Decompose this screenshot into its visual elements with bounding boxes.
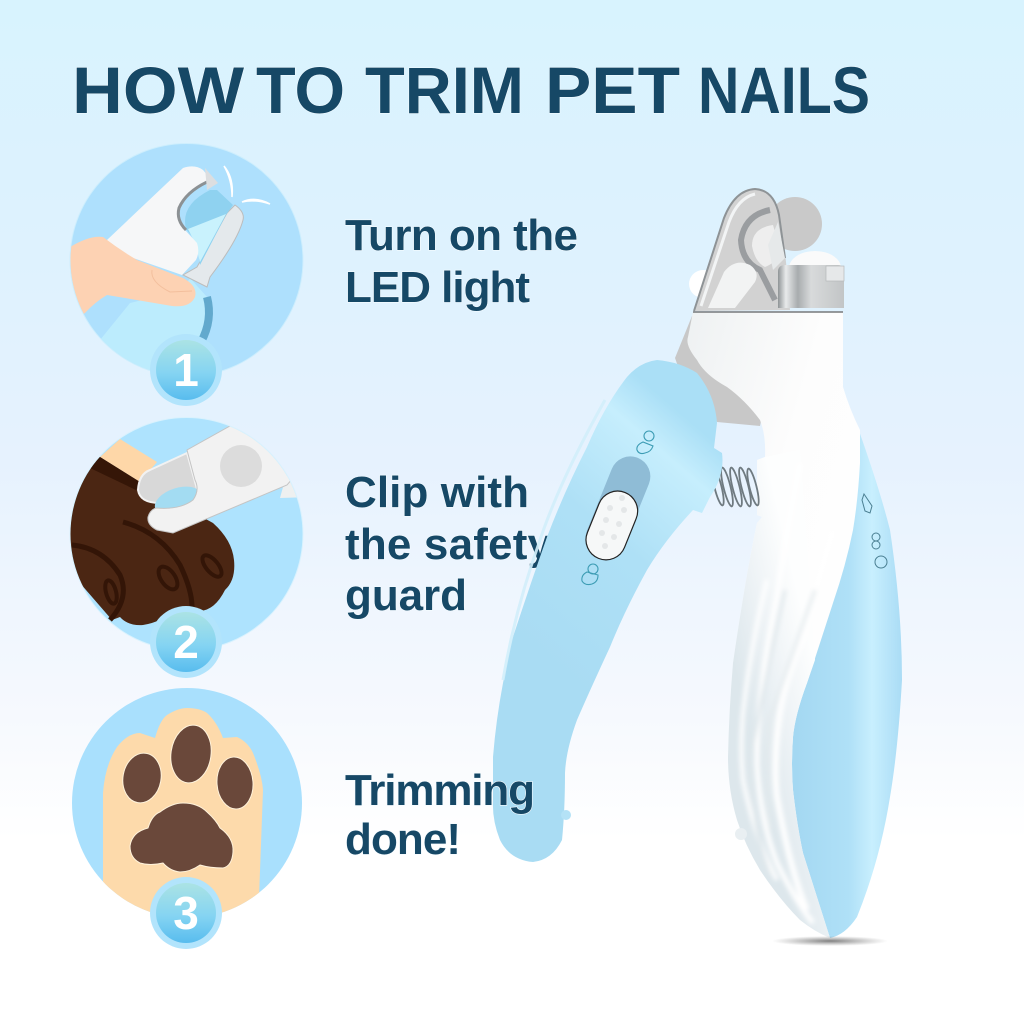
title: HOW (72, 53, 245, 127)
product: nail clipper (493, 189, 902, 946)
clipper guard (138, 453, 200, 503)
step 3 caption (345, 766, 535, 864)
finger (70, 236, 196, 314)
clipper body (147, 426, 290, 534)
number badge 3 (150, 877, 222, 949)
white pill (708, 263, 757, 308)
lock icon top (637, 431, 654, 454)
toe pad right (215, 756, 255, 810)
toe pad left (119, 750, 165, 806)
paw toe lines (72, 522, 192, 620)
step 2 caption: the safety (345, 520, 553, 569)
step 2 caption (345, 468, 553, 620)
number badge 1 (150, 334, 222, 406)
grey back disc (768, 197, 822, 251)
right handle grooves (742, 463, 833, 923)
handle side icons (862, 494, 887, 568)
clipper body (107, 166, 208, 275)
number badge 3: 3 (173, 887, 199, 939)
step 1 caption: Turn on the (345, 211, 578, 260)
panel: step 1 illustration (60, 143, 304, 406)
foot bump (561, 810, 571, 820)
chrome cylinder and dome (778, 251, 844, 308)
toe pad middle (167, 722, 215, 786)
blade hole (752, 225, 780, 267)
dark seam under guard (693, 311, 843, 313)
number badge 1: 1 (173, 344, 199, 396)
pale strip behind clipper (280, 476, 296, 498)
light glow below clipper (102, 279, 206, 370)
brown dog paw (60, 457, 234, 625)
number badge 2 (150, 606, 222, 678)
step 1 caption: LED light (345, 263, 530, 312)
title: TO (256, 53, 345, 127)
title: NAILS (698, 53, 870, 127)
crescent blade (741, 210, 775, 300)
panel: step 2 illustration (60, 417, 310, 678)
transparent guard (694, 189, 790, 311)
clipper disc (220, 445, 262, 487)
step 1 caption (345, 211, 578, 312)
step 3 caption: Trimming (345, 766, 535, 815)
paw claw marks (156, 564, 180, 592)
step 2 caption: Clip with (345, 468, 529, 517)
right handle white body (687, 312, 860, 938)
foot bump on right handle (735, 828, 747, 840)
right handle blue side (770, 428, 902, 938)
dark cord arc (201, 297, 209, 342)
title (72, 53, 870, 127)
shaded grip area (728, 450, 830, 938)
slider button (580, 485, 644, 566)
main pad (130, 803, 233, 872)
lock icon bottom (582, 564, 598, 585)
grey blade (675, 316, 770, 426)
panel: step 3 illustration (72, 688, 302, 949)
step 2 caption: guard (345, 571, 467, 620)
title: PET (545, 53, 680, 127)
step 3 caption: done! (345, 815, 461, 864)
spring (710, 467, 761, 507)
peach skin strip (100, 439, 157, 482)
clipper lens (154, 486, 196, 508)
paw pale skin (103, 708, 263, 925)
white side knob (689, 270, 717, 298)
base shadow (772, 936, 888, 946)
clipper lower arm (183, 205, 243, 287)
number badge 2: 2 (173, 616, 199, 668)
blue light wedge (185, 190, 233, 265)
flying nail clippings (224, 166, 270, 204)
title: TRIM (365, 53, 524, 127)
left blue handle (493, 360, 722, 862)
slider slot (580, 450, 656, 564)
